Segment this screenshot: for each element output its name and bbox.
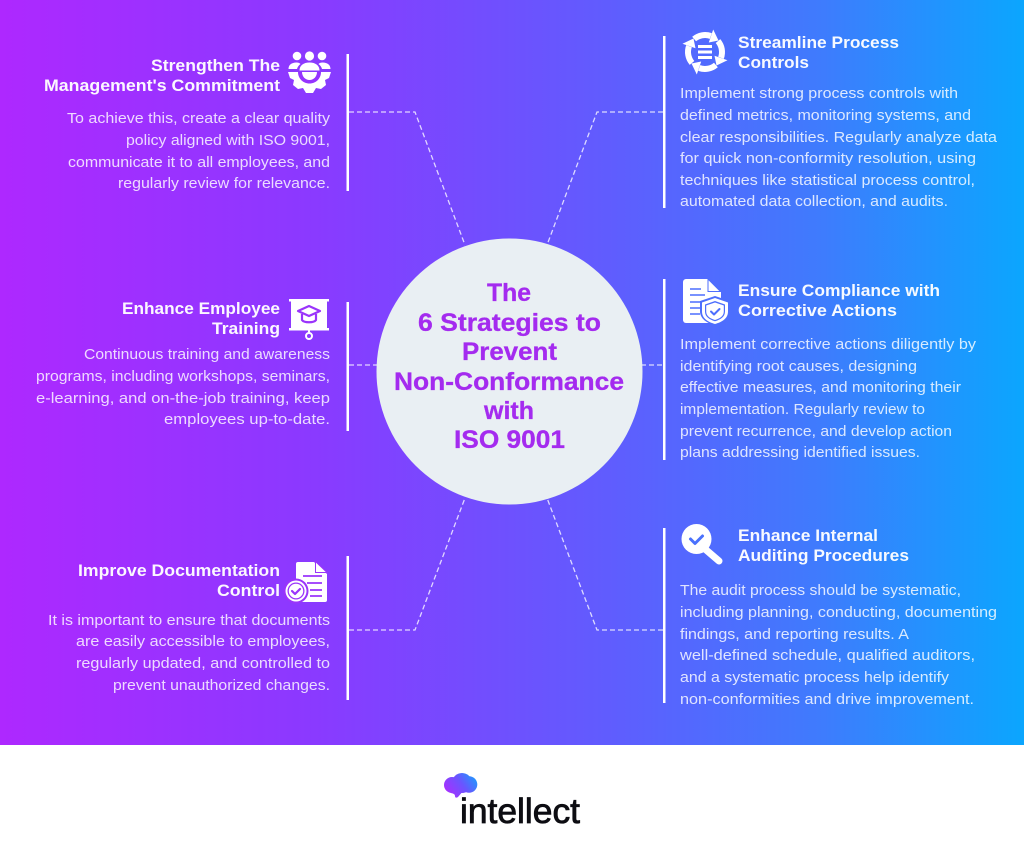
title: with bbox=[483, 397, 534, 425]
icon: cloud brain bbox=[444, 773, 477, 798]
heading bbox=[738, 282, 940, 320]
panel: ensure compliance with corrective actions bbox=[663, 279, 977, 461]
icon: circular arrows with list bbox=[682, 30, 728, 74]
text block: employees up-to-date. bbox=[164, 412, 330, 428]
text block: including planning, conducting, documenting bbox=[680, 605, 997, 621]
text block: findings, and reporting results. A bbox=[680, 627, 909, 643]
text block: non-conformities and drive improvement. bbox=[680, 692, 974, 708]
icon: document with shield bbox=[683, 279, 730, 326]
text block: To achieve this, create a clear quality bbox=[67, 111, 331, 127]
title: The bbox=[487, 279, 531, 307]
icon: people and gear bbox=[288, 51, 331, 93]
text block: e-learning, and on-the-job training, keep bbox=[36, 391, 330, 407]
logo: intellect bbox=[444, 773, 580, 831]
heading: Streamline Process bbox=[738, 34, 899, 52]
text block bbox=[680, 337, 977, 461]
heading: Enhance Internal bbox=[738, 527, 878, 545]
text block: well-defined schedule, qualified auditors, bbox=[679, 648, 975, 664]
text block: implementation. Regularly review to bbox=[680, 402, 925, 418]
title: 6 Strategies to bbox=[418, 309, 601, 337]
text block: It is important to ensure that documents bbox=[48, 613, 330, 629]
heading: Training bbox=[212, 320, 280, 338]
text block: techniques like statistical process control, bbox=[680, 173, 975, 189]
text block bbox=[48, 613, 330, 694]
heading bbox=[44, 57, 281, 95]
icon: document with check bbox=[284, 562, 327, 604]
heading: Controls bbox=[738, 54, 809, 72]
icon: magnifying glass with check bbox=[682, 524, 719, 561]
text block: regularly updated, and controlled to bbox=[76, 656, 330, 672]
title bbox=[394, 279, 624, 454]
text block: clear responsibilities. Regularly analyze data bbox=[680, 130, 998, 146]
text block: Implement strong process controls with bbox=[680, 86, 958, 102]
heading bbox=[78, 562, 280, 600]
title: Prevent bbox=[462, 338, 558, 366]
text block: effective measures, and monitoring their bbox=[680, 380, 961, 396]
heading: Corrective Actions bbox=[738, 302, 897, 320]
title: ISO 9001 bbox=[454, 426, 565, 454]
connector lines bbox=[349, 112, 663, 630]
text block: defined metrics, monitoring systems, and bbox=[680, 108, 971, 124]
heading: Enhance Employee bbox=[122, 300, 280, 318]
panel: enhance employee training bbox=[36, 299, 349, 431]
text block: plans addressing identified issues. bbox=[680, 445, 920, 461]
text block bbox=[679, 583, 997, 708]
center circle with title bbox=[376, 238, 642, 504]
heading bbox=[738, 34, 899, 72]
text block bbox=[67, 111, 331, 192]
text block bbox=[680, 86, 998, 210]
icon: presentation board with graduation cap bbox=[289, 299, 329, 339]
text block: prevent unauthorized changes. bbox=[113, 678, 330, 694]
text block: The audit process should be systematic, bbox=[680, 583, 961, 599]
text block: communicate it to all employees, and bbox=[68, 155, 330, 171]
heading bbox=[738, 527, 909, 565]
heading: Management's Commitment bbox=[44, 77, 281, 95]
title: Non-Conformance bbox=[394, 368, 624, 396]
text block bbox=[36, 347, 330, 428]
heading bbox=[122, 300, 280, 338]
wordmark: intellect bbox=[460, 792, 580, 831]
text block: automated data collection, and audits. bbox=[680, 194, 948, 210]
panel: streamline process controls bbox=[663, 30, 998, 210]
text block: Implement corrective actions diligently by bbox=[680, 337, 977, 353]
panel: improve documentation control bbox=[48, 556, 349, 700]
heading: Improve Documentation bbox=[78, 562, 280, 580]
text block: regularly review for relevance. bbox=[118, 176, 330, 192]
heading: Ensure Compliance with bbox=[738, 282, 940, 300]
text block: programs, including workshops, seminars, bbox=[36, 369, 330, 385]
text block: prevent recurrence, and develop action bbox=[680, 424, 952, 440]
heading: Control bbox=[217, 582, 280, 600]
heading: Strengthen The bbox=[151, 57, 280, 75]
text block: for quick non-conformity resolution, using bbox=[680, 151, 976, 167]
heading: Auditing Procedures bbox=[738, 547, 909, 565]
panel: enhance internal auditing procedures bbox=[663, 524, 997, 708]
text block: are easily accessible to employees, bbox=[76, 634, 330, 650]
text block: Continuous training and awareness bbox=[84, 347, 330, 363]
text block: policy aligned with ISO 9001, bbox=[126, 133, 330, 149]
text block: and a systematic process help identify bbox=[680, 670, 950, 686]
text block: identifying root causes, designing bbox=[680, 359, 917, 375]
panel: strengthen management commitment bbox=[44, 51, 349, 192]
